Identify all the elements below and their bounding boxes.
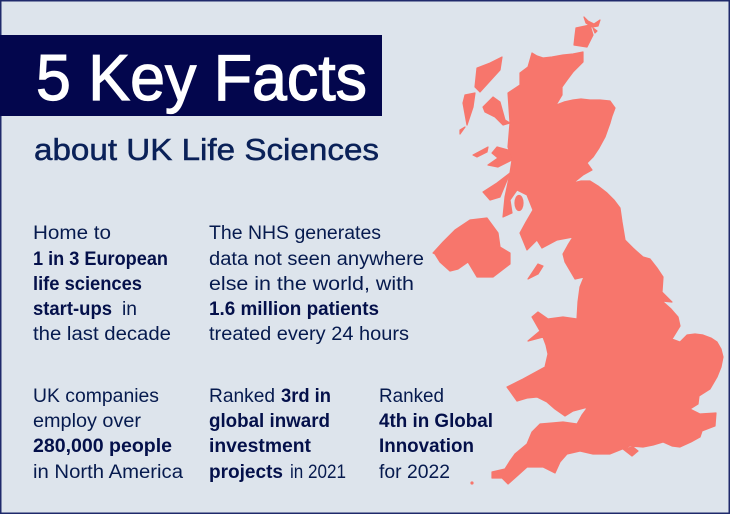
Tiree and Coll [473, 147, 488, 157]
Isles of Scilly [471, 482, 473, 484]
Mull [488, 147, 512, 167]
fact: inward investment: global inward [209, 411, 330, 432]
Isle of Wight [623, 447, 638, 456]
fact: global innovation: for 2022 [379, 462, 450, 483]
Lewis [475, 57, 502, 92]
fact: start-ups: Home to [33, 223, 111, 244]
subtitle: about UK Life Sciences [34, 132, 379, 167]
fact: NHS data: treated every 24 hours [209, 324, 409, 345]
fact: NHS data: 1.6 million patients [209, 299, 379, 320]
fact: start-ups: 1 in 3 European [33, 249, 168, 270]
Islay and Jura [483, 173, 510, 200]
title banner: 5 Key Facts [36, 41, 367, 114]
Isle of Man [528, 264, 543, 279]
fact: inward investment: investment [209, 436, 312, 457]
Great Britain mainland [492, 52, 723, 484]
fact: start-ups: life sciences [33, 274, 142, 295]
fact: inward investment: Ranked [209, 386, 275, 407]
map of the UK [433, 17, 723, 484]
fact: North America employment: 280,000 people [33, 436, 172, 457]
fact: NHS data: data not seen anywhere [209, 249, 424, 270]
fact: global innovation: Ranked [379, 386, 444, 407]
fact: North America employment: UK companies [33, 386, 159, 407]
fact: start-ups: in [122, 299, 137, 320]
fact: inward investment: in 2021 [290, 462, 346, 483]
fact: start-ups: the last decade [33, 324, 171, 345]
Uist [463, 93, 475, 125]
Barra [460, 127, 465, 134]
Skye [483, 97, 510, 125]
Northern Ireland [433, 218, 510, 277]
fact: North America employment: employ over [33, 411, 142, 432]
Arran [515, 196, 523, 210]
fact: NHS data: else in the world, with [209, 274, 414, 295]
fact: NHS data: The NHS generates [209, 223, 381, 244]
fact: inward investment [209, 386, 346, 483]
Orkney [574, 25, 593, 47]
fact: global innovation [379, 386, 493, 483]
fact: global innovation: Innovation [379, 436, 474, 457]
fact: start-ups: start-ups [33, 299, 112, 320]
fact: inward investment: 3rd in [281, 386, 331, 407]
fact: NHS data [209, 223, 424, 345]
fact: global innovation: 4th in Global [379, 411, 493, 432]
fact: start-ups [33, 223, 171, 345]
Orkney north isles [584, 17, 600, 33]
fact: inward investment: projects [209, 462, 283, 483]
fact: North America employment [33, 386, 183, 483]
fact: North America employment: in North America [33, 462, 183, 483]
